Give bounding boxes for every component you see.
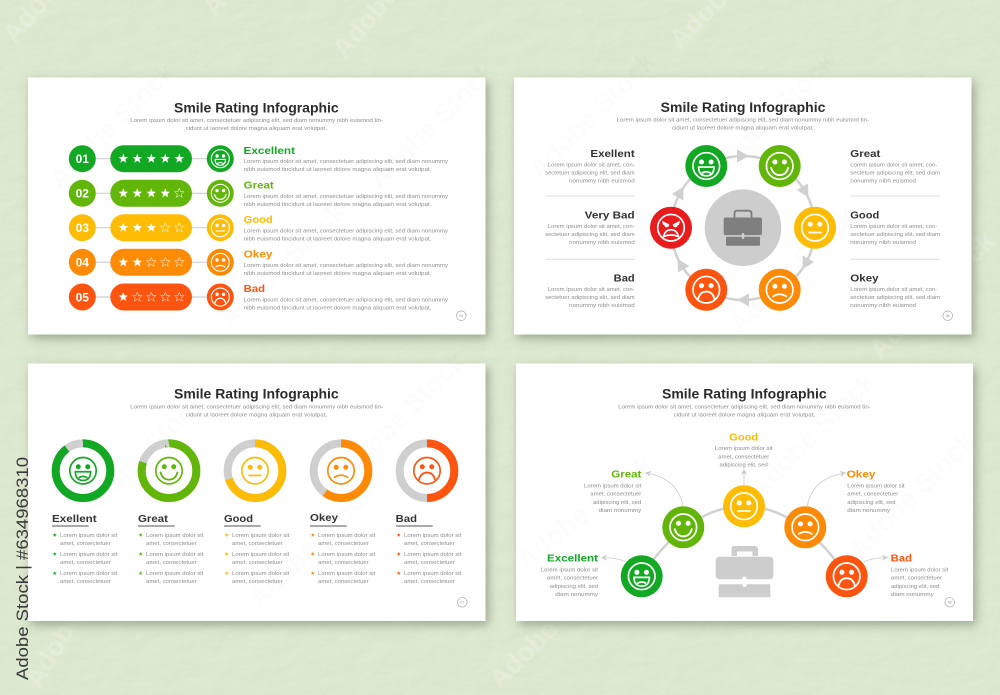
row 01 excellent: 01 [76,152,89,166]
text: excellent: adipiscing elit, sed [550,584,598,590]
column text: okey: amet, consectetuer [318,560,369,566]
text: good: Good [850,209,879,221]
column text: exellent: amet, consectetuer [60,541,111,547]
text: okey: adipiscing elit, sed [847,500,896,506]
row 02 great: nibh euismod tincidunt ut laoreet dolore magna aliquam erat volutpat, [244,202,431,208]
text: okey: diam nonummy [847,508,890,514]
text: good: sectetuer adipiscing elit, sed diam [850,232,941,238]
text: okey: nonummy nibh euismod [850,303,916,309]
text: excellent: amet, consectetuer [547,576,598,582]
panel: star rating list [28,56,502,334]
row 04 okey [69,249,448,277]
column text: good: Lorem ipsum dolor sit [232,552,290,558]
column text: bad: amet, consectetuer [404,541,455,547]
text: excellent: Lorem ipsum dolor sit [541,568,599,574]
text: great: Lorem ipsum dolor sit [584,484,642,490]
text: bad: sectetuer adipiscing elit, sed diam [545,295,635,301]
row 04 okey: nibh euismod tincidunt ut laoreet dolore magna aliquam erat volutpat, [244,271,431,277]
row 01 excellent: nibh euismod tincidunt ut laoreet dolore magna aliquam erat volutpat, [244,167,431,173]
text: good: nonummy nibh euismod [850,240,916,246]
row 03 good: nibh euismod tincidunt ut laoreet dolore magna aliquam erat volutpat, [244,236,431,242]
column text: good: amet, consectetuer [232,541,283,547]
row 03 good: Good [244,214,273,226]
text: great: adipiscing elit, sed [593,500,641,506]
column text: great: amet, consectetuer [146,560,197,566]
text: exellent: Lorem ipsum dolor sit amet, con- [548,162,635,168]
column text: bad: Lorem ipsum dolor sit [404,533,462,539]
face: bad [685,269,727,311]
column text: good: Lorem ipsum dolor sit [232,533,290,539]
text: bad: diam nonummy [891,592,934,598]
column text: bad: Lorem ipsum dolor sit [404,552,462,558]
face: good [794,207,836,249]
column text: bad [396,513,462,585]
column text: exellent: Lorem ipsum dolor sit [60,533,118,539]
text: exellent: nonummy nibh euismod [569,179,635,185]
text: bad: Bad [891,553,912,565]
row 01 excellent: Lorem ipsum dolor sit amet, consectetuer adipiscing elit, sed diam nonummy [244,159,448,165]
column text: okey: amet, consectetuer [318,579,369,585]
text: good: amet, consectetuer [718,454,769,460]
column text: bad: amet, consectetuer [404,560,455,566]
text: okey: Okey [847,469,876,481]
text: very bad: Very Bad [585,209,635,221]
face: okey [759,269,801,311]
row 02 great: 02 [76,187,89,201]
background watermarks: Adobe Stock [483,556,622,694]
column text: good: amet, consectetuer [232,560,283,566]
face: very bad [650,207,692,249]
face: great [662,506,704,548]
row 04 okey: 04 [76,256,89,270]
column text: okey: Lorem ipsum dolor sit [318,533,376,539]
column text: okey: Lorem ipsum dolor sit [318,571,376,577]
text: great: amet, consectetuer [590,492,642,498]
text: good: Lorem ipsum dolor sit [715,446,773,452]
subtitle: Lorem ipsum dolor sit amet, consectetuer adipiscing elit, sed diam nonummy nibh euismod tin- [130,404,383,410]
row 02 great: Great [244,180,274,192]
text: okey: Okey [850,272,879,284]
text: bad [891,553,949,598]
subtitle: cidunt ut laoreet dolore magna aliquam erat volutpat, [186,413,327,419]
text: great: Lorem ipsum dolor sit amet, con- [850,162,938,168]
subtitle [130,404,383,419]
donut: bad 50% [400,443,454,498]
row 04 okey: Okey [244,249,273,261]
face: excellent [685,145,727,187]
panel: smile cycle [514,46,972,339]
row 05 bad: Lorem ipsum dolor sit amet, consectetuer adipiscing elit, sed diam nonummy [244,297,448,303]
text: great: Great [611,469,642,481]
text: okey: amet, consectetuer [847,492,899,498]
text: exellent [545,148,635,185]
text: okey: Lorem ipsum dolor sit amet, con- [850,287,938,293]
column text: great: amet, consectetuer [146,579,197,585]
column text: good: amet, consectetuer [232,579,283,585]
column text: exellent: Lorem ipsum dolor sit [60,571,118,577]
column text: exellent: amet, consectetuer [60,579,111,585]
text: excellent: Excellent [547,553,599,565]
page number 06 [943,311,952,321]
column text: great: Great [138,513,169,525]
panel: smile arc [510,364,982,621]
column text: bad: Lorem ipsum dolor sit [404,571,462,577]
page number 06: 06 [946,314,950,318]
row 03 good: 03 [76,221,89,235]
column text: great: Lorem ipsum dolor sit [146,571,204,577]
column text: great [138,513,204,585]
column text: bad: amet, consectetuer [404,579,455,585]
row 03 good [69,214,448,242]
text: bad [545,272,635,309]
column text: great: Lorem ipsum dolor sit [146,533,204,539]
column text: okey: amet, consectetuer [318,541,369,547]
face: good [723,485,765,527]
column text: exellent [52,513,118,585]
subtitle [130,118,383,132]
column text: bad: Bad [396,513,417,525]
icon: briefcase [716,546,773,597]
row 05 bad: 05 [76,290,89,304]
text: good: Good [729,431,758,443]
text: bad: Bad [614,272,635,284]
heading: Smile Rating Infographic [174,100,339,115]
subtitle: cidunt ut laoreet dolore magna aliquam erat volutpat, [186,126,327,132]
column text: okey: Lorem ipsum dolor sit [318,552,376,558]
side credit: Adobe Stock number: Adobe Stock | #634968310 [13,457,32,680]
page number 08 [945,598,954,607]
cycle ring with arrows [671,150,815,306]
row 02 great [69,180,448,208]
text: excellent: diam nonummy [555,592,598,598]
subtitle: Lorem ipsum dolor sit amet, consectetuer adipiscing elit, sed diam nonummy nibh euismod tin- [130,118,383,124]
column text: good [224,513,290,585]
text: bad: Lorem ipsum dolor sit amet, con- [548,287,635,293]
text: very bad: nonummy nibh euismod [569,240,635,246]
row 02 great: Lorem ipsum dolor sit amet, consectetuer adipiscing elit, sed diam nonummy [244,194,448,200]
text: very bad [545,209,635,246]
text: okey [847,469,905,514]
heading: Smile Rating Infographic [662,387,827,402]
heading: Smile Rating Infographic [661,100,826,115]
text: okey: sectetuer adipiscing elit, sed diam [850,295,941,301]
column text: exellent: Exellent [52,513,97,525]
page number 07 [458,598,467,607]
row 05 bad: nibh euismod tincidunt ut laoreet dolore magna aliquam erat volutpat, [244,305,431,311]
text: great [850,148,941,185]
column text: good: Lorem ipsum dolor sit [232,571,290,577]
row 05 bad: Bad [244,283,265,295]
row 01 excellent: Excellent [244,145,296,157]
subtitle: cidunt ut laoreet dolore magna aliquam erat volutpat, [672,126,814,132]
subtitle [617,117,869,132]
text: bad: Lorem ipsum dolor sit [891,568,949,574]
text: good: Lorem ipsum dolor sit amet, con- [850,224,938,230]
text: okey [850,272,941,309]
text: exellent: sectetuer adipiscing elit, sed diam [545,170,635,176]
subtitle: Lorem ipsum dolor sit amet, consectetuer adipiscing elit, sed diam nonummy nibh euismod tin- [617,117,869,123]
text: okey: Lorem ipsum dolor sit [847,484,905,490]
text: good [850,209,941,246]
text: great: sectetuer adipiscing elit, sed diam [850,170,941,176]
text: good [715,431,773,468]
page number 08: 08 [948,601,952,605]
background watermarks: Adobe Stock [19,534,128,693]
connecting arc [642,506,847,576]
text: bad: adipiscing elit, sed [891,584,939,590]
face: great [759,145,801,187]
face: bad [826,555,868,597]
text: great [584,469,642,514]
center circle with briefcase [705,189,781,266]
subtitle: cidunt ut laoreet dolore magna aliquam erat volutpat, [674,413,815,419]
text: very bad: sectetuer adipiscing elit, sed diam [545,232,635,238]
column text: good: Good [224,513,253,525]
donut: great 80% [142,443,196,498]
background watermarks: Adobe Stock [863,226,1000,364]
text: great: nonummy nibh euismod [850,179,916,185]
face: okey [784,506,826,548]
heading: Smile Rating Infographic [174,387,339,402]
page number 05: 05 [459,314,463,318]
text: bad: nonummy nibh euismod [569,303,635,309]
row 05 bad [69,283,448,311]
donut: okey 60% [314,443,368,498]
row 04 okey: Lorem ipsum dolor sit amet, consectetuer adipiscing elit, sed diam nonummy [244,263,448,269]
text: very bad: Lorem ipsum dolor sit amet, con- [548,224,635,230]
subtitle [618,404,871,419]
page number 07: 07 [460,601,464,605]
column text: exellent: amet, consectetuer [60,560,111,566]
text: excellent [541,553,599,598]
donut: good 70% [228,443,282,498]
page number 05 [456,311,466,321]
text: exellent: Exellent [590,148,635,160]
donut: excellent 90% [56,443,110,498]
face: excellent [621,555,663,597]
text: bad: amet, consectetuer [891,576,942,582]
subtitle: Lorem ipsum dolor sit amet, consectetuer adipiscing elit, sed diam nonummy nibh euismod tin- [618,404,871,410]
column text: exellent: Lorem ipsum dolor sit [60,552,118,558]
row 01 excellent [69,145,448,173]
row 03 good: Lorem ipsum dolor sit amet, consectetuer adipiscing elit, sed diam nonummy [244,228,448,234]
column text: okey: Okey [310,512,338,524]
column text: okey [310,512,376,585]
text: great: diam nonummy [599,508,642,514]
text: good: adipiscing elit, sed [720,462,768,468]
text: great: Great [850,148,881,160]
column text: great: amet, consectetuer [146,541,197,547]
column text: great: Lorem ipsum dolor sit [146,552,204,558]
callout arrows [606,474,883,562]
panel: donut charts [28,346,486,621]
